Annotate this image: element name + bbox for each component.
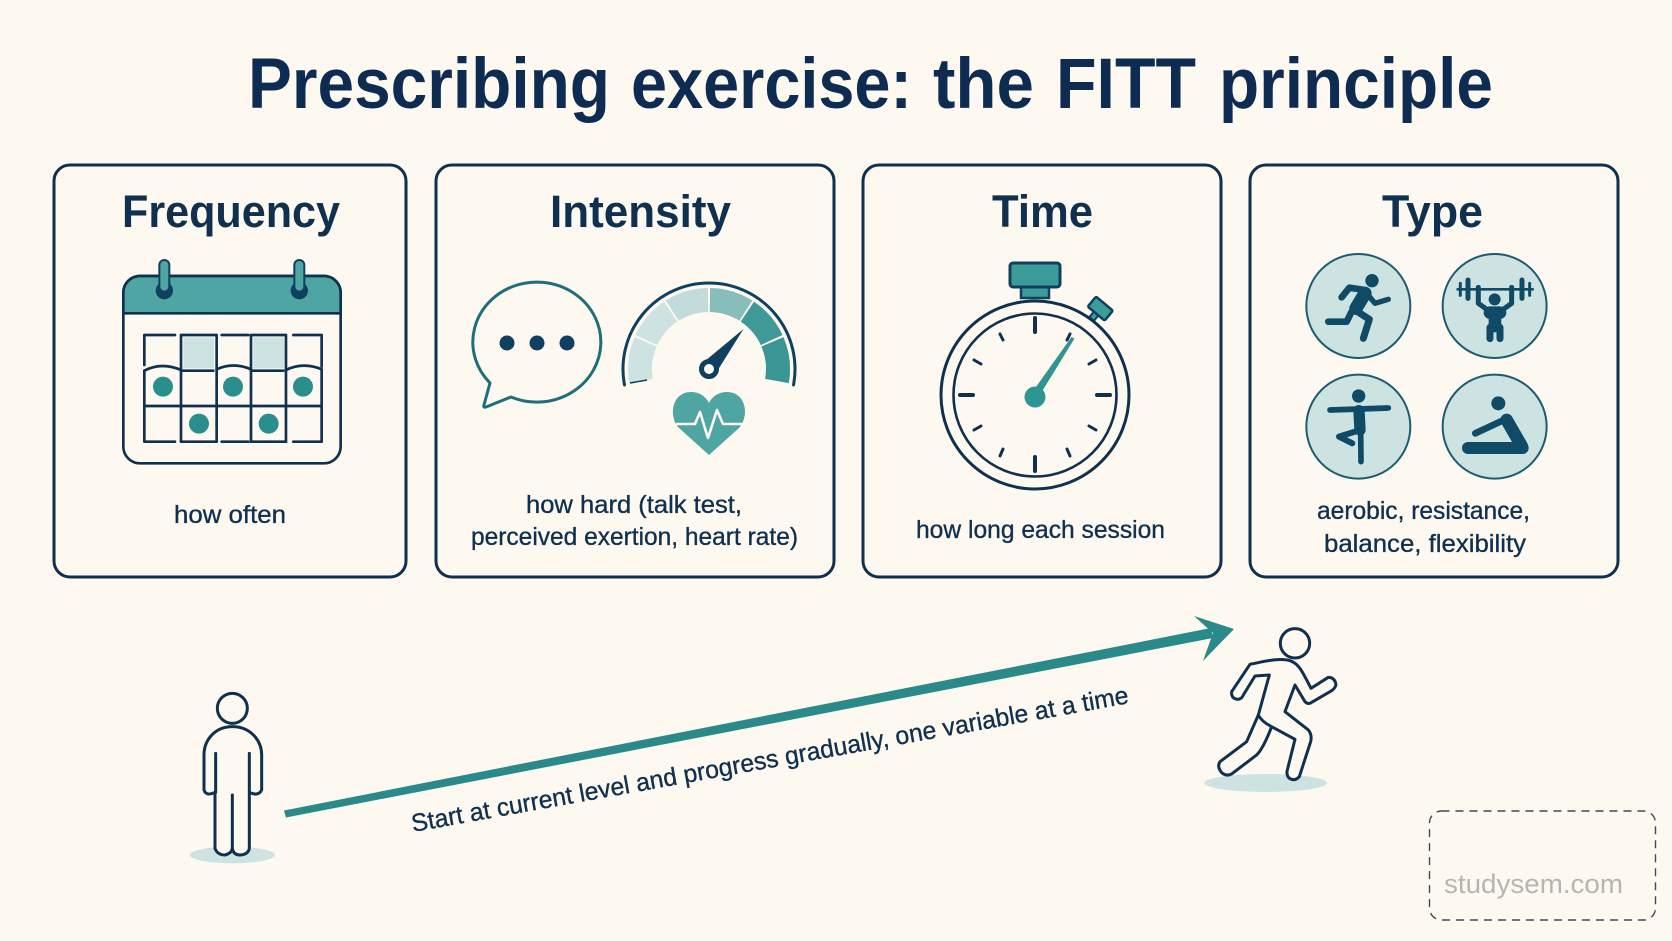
caption: time: how long each session: [916, 516, 1165, 544]
panel: type: [1250, 165, 1618, 577]
icon: heart rate: [673, 392, 745, 455]
title: the: [933, 45, 1034, 124]
label: progression advice: Start at current level and progress gradually, one variable at a time: [409, 681, 1131, 838]
icons: exercise types: [1306, 254, 1547, 479]
title: FITT: [1056, 45, 1196, 124]
caption: intensity: perceived exertion, heart rate): [471, 523, 798, 551]
watermark box: [1430, 811, 1656, 920]
icon: speech bubble: [473, 282, 601, 407]
caption: intensity: [471, 491, 798, 551]
icon: standing person: [190, 693, 275, 863]
title: exercise:: [631, 45, 912, 124]
icon: balance pose: [1306, 375, 1410, 479]
title: Prescribing: [248, 45, 610, 124]
icon: stopwatch: [941, 263, 1129, 489]
panel: time: [863, 165, 1221, 577]
icon: flexibility stretch: [1443, 375, 1547, 479]
icon: resistance weightlifter: [1443, 254, 1547, 358]
title: principle: [1219, 45, 1493, 124]
caption: type: balance, flexibility: [1324, 530, 1527, 558]
heading: frequency: Frequency: [122, 186, 340, 237]
panel: frequency: [54, 165, 406, 577]
heading: intensity: Intensity: [550, 186, 731, 237]
icon: aerobic runner: [1306, 254, 1410, 358]
heading: type: Type: [1382, 186, 1483, 237]
arrow: gradual progression: [284, 616, 1234, 818]
panel: intensity: [436, 165, 834, 577]
heading: time: Time: [992, 186, 1093, 237]
title: [248, 45, 1493, 124]
caption: frequency: how often: [174, 501, 286, 529]
caption: type: [1317, 497, 1530, 558]
watermark text: studysem.com: [1444, 869, 1623, 899]
caption: type: aerobic, resistance,: [1317, 497, 1530, 525]
icon: effort gauge: [623, 283, 795, 385]
icon: running person: [1204, 629, 1336, 792]
caption: intensity: how hard (talk test,: [526, 491, 742, 519]
icon: calendar: [123, 260, 341, 463]
